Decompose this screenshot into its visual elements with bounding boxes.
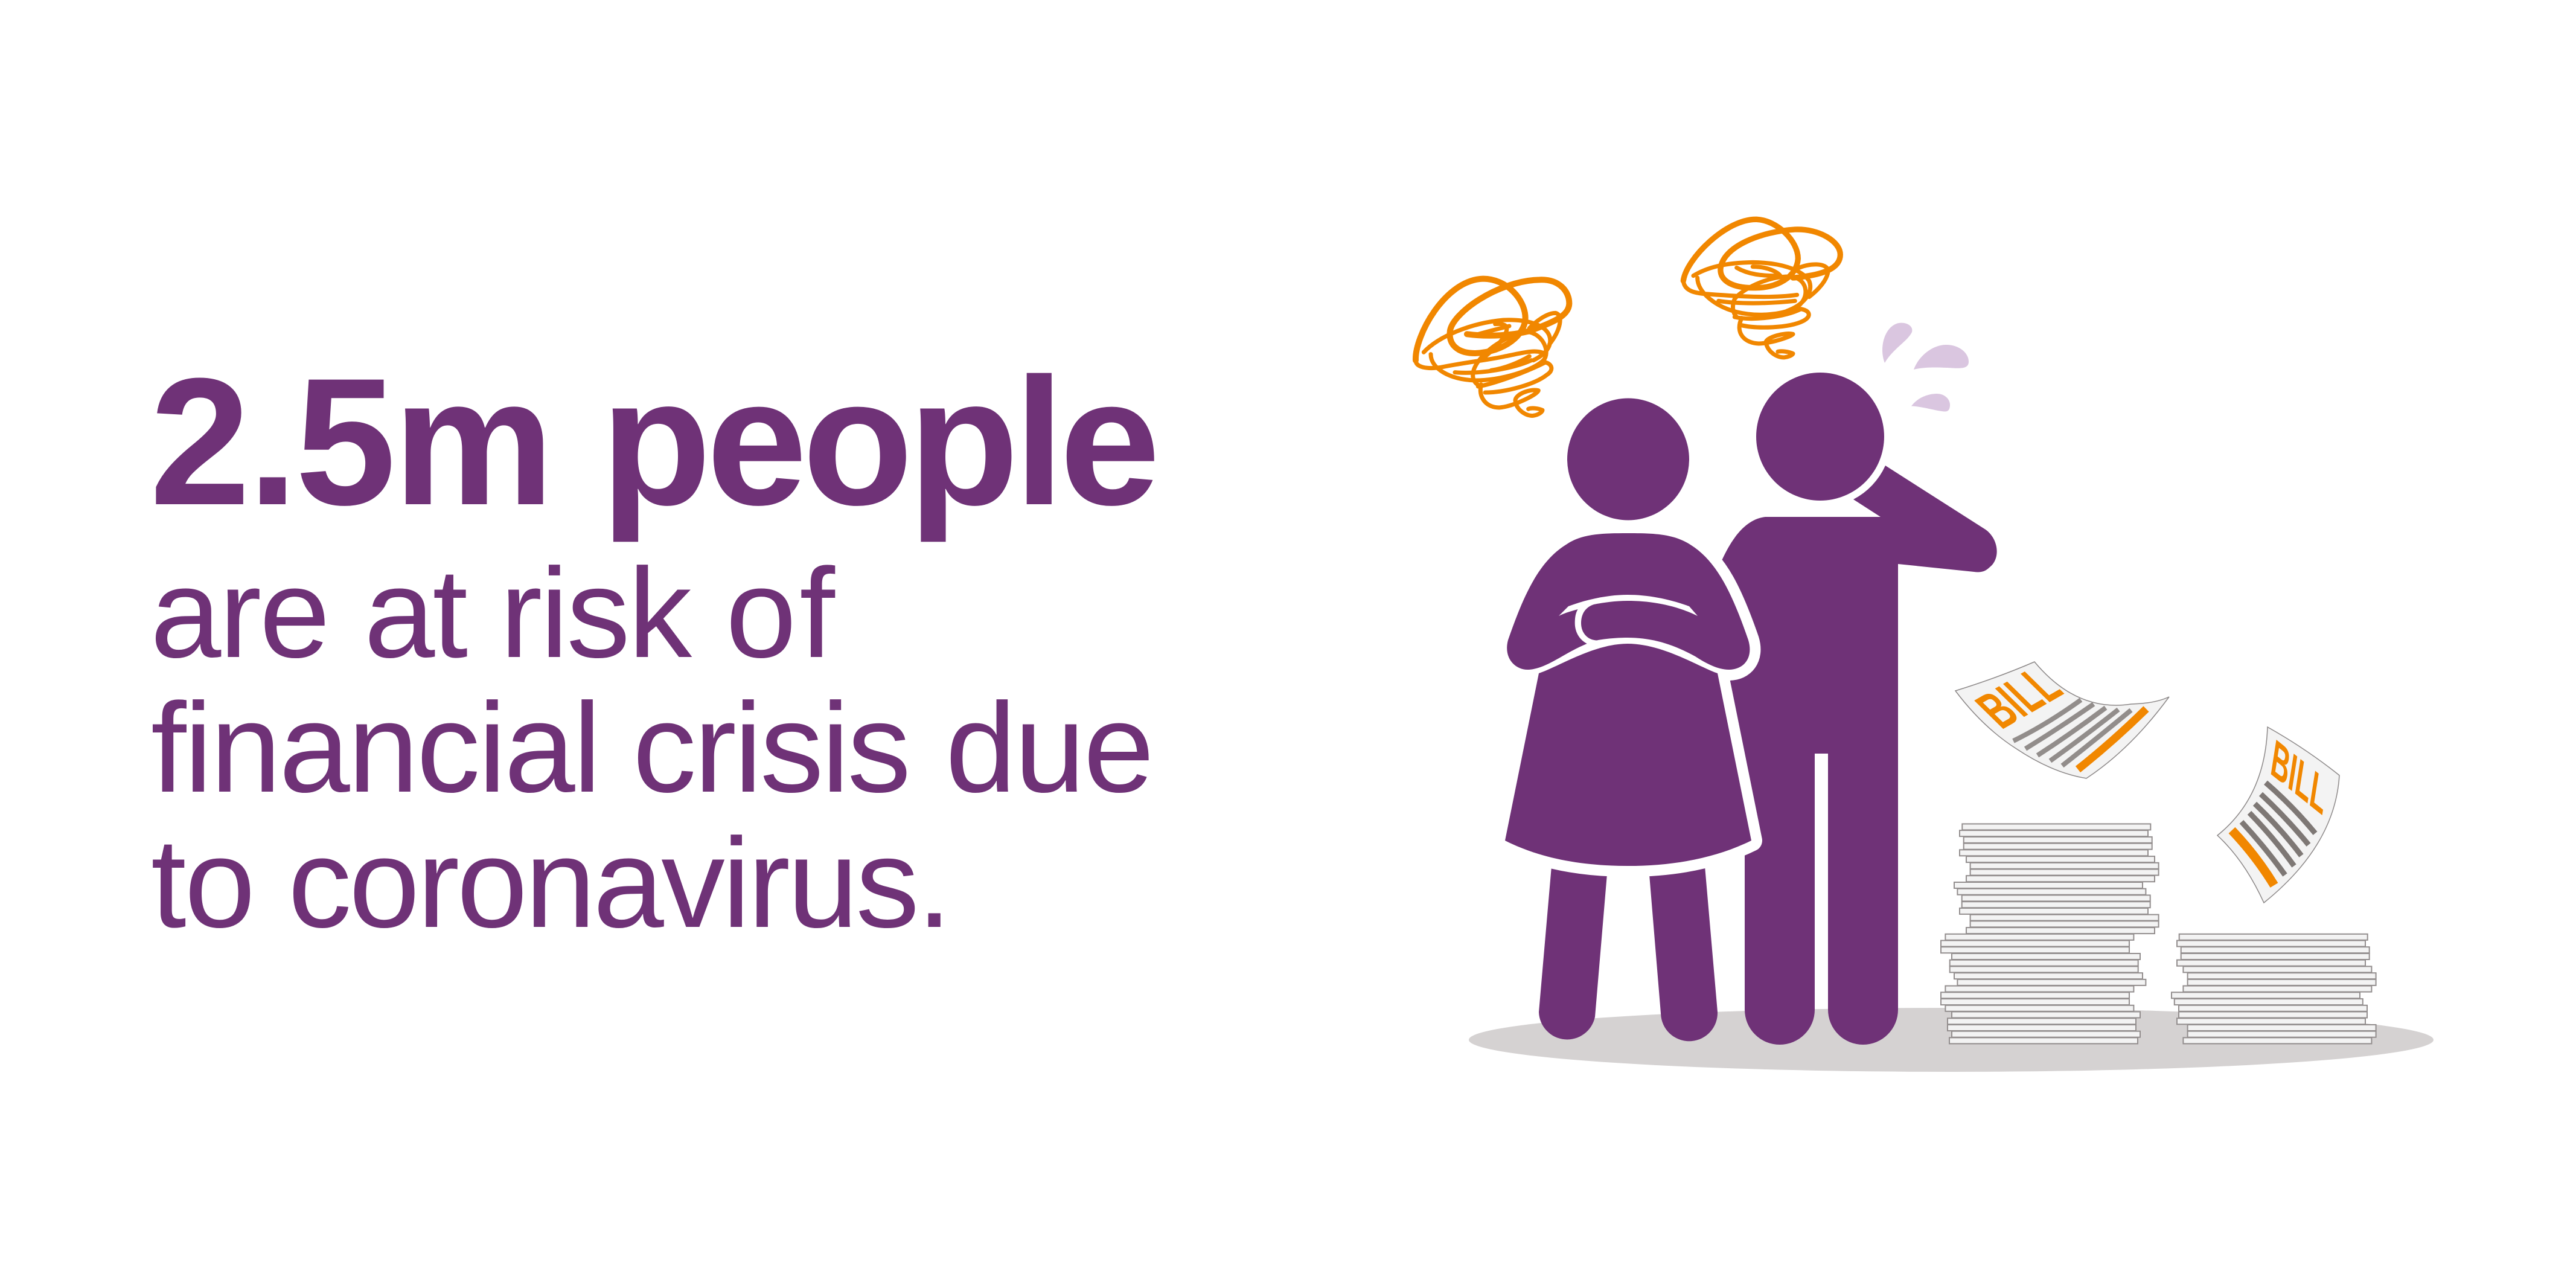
text line: are at risk of: risk bbox=[500, 542, 692, 684]
man body and raised arm bbox=[1690, 466, 1997, 1045]
icon: sweat drops bbox=[1882, 323, 1969, 412]
icon: stress scribble left bbox=[1416, 279, 1569, 415]
heading: 2.5m people bbox=[150, 340, 1160, 544]
headline text bbox=[150, 340, 1160, 954]
woman head bbox=[1567, 399, 1689, 521]
paper stack left bbox=[1941, 824, 2159, 1043]
icon: stress scribble right bbox=[1683, 219, 1840, 357]
woman torso and crossed arms bbox=[1507, 533, 1750, 670]
heading: 2.5m people: people bbox=[601, 340, 1160, 544]
text line: financial crisis due bbox=[151, 676, 1154, 819]
paper stack right bbox=[2172, 934, 2376, 1043]
text line: to coronavirus.: coronavirus. bbox=[288, 812, 952, 954]
white crossed-arm line bbox=[1559, 595, 1698, 644]
icon: falling bill left bbox=[1955, 656, 2169, 778]
ground shadow bbox=[1469, 1008, 2434, 1072]
heading: 2.5m people: 2.5m bbox=[150, 340, 554, 543]
icon: falling bill right bbox=[2217, 727, 2339, 903]
woman white outline bbox=[1505, 533, 1751, 866]
text line: financial crisis due: financial bbox=[151, 676, 601, 819]
text line: are at risk of: of bbox=[726, 542, 835, 684]
text line: are at risk of: are bbox=[150, 542, 330, 684]
icon: falling bill right: BILL bbox=[2268, 728, 2330, 827]
text line: are at risk of bbox=[150, 542, 835, 684]
text line: are at risk of: at bbox=[364, 542, 468, 684]
icon: falling bill left: BILL bbox=[1963, 656, 2074, 739]
woman figure bbox=[1505, 399, 1751, 1041]
text line: financial crisis due: due bbox=[945, 676, 1154, 819]
man head bbox=[1756, 373, 1884, 501]
woman dress bbox=[1505, 644, 1751, 866]
text line: to coronavirus.: to bbox=[151, 812, 255, 954]
text line: financial crisis due: crisis bbox=[633, 676, 911, 819]
man figure bbox=[1690, 373, 1997, 1045]
woman legs bbox=[1539, 845, 1718, 1041]
